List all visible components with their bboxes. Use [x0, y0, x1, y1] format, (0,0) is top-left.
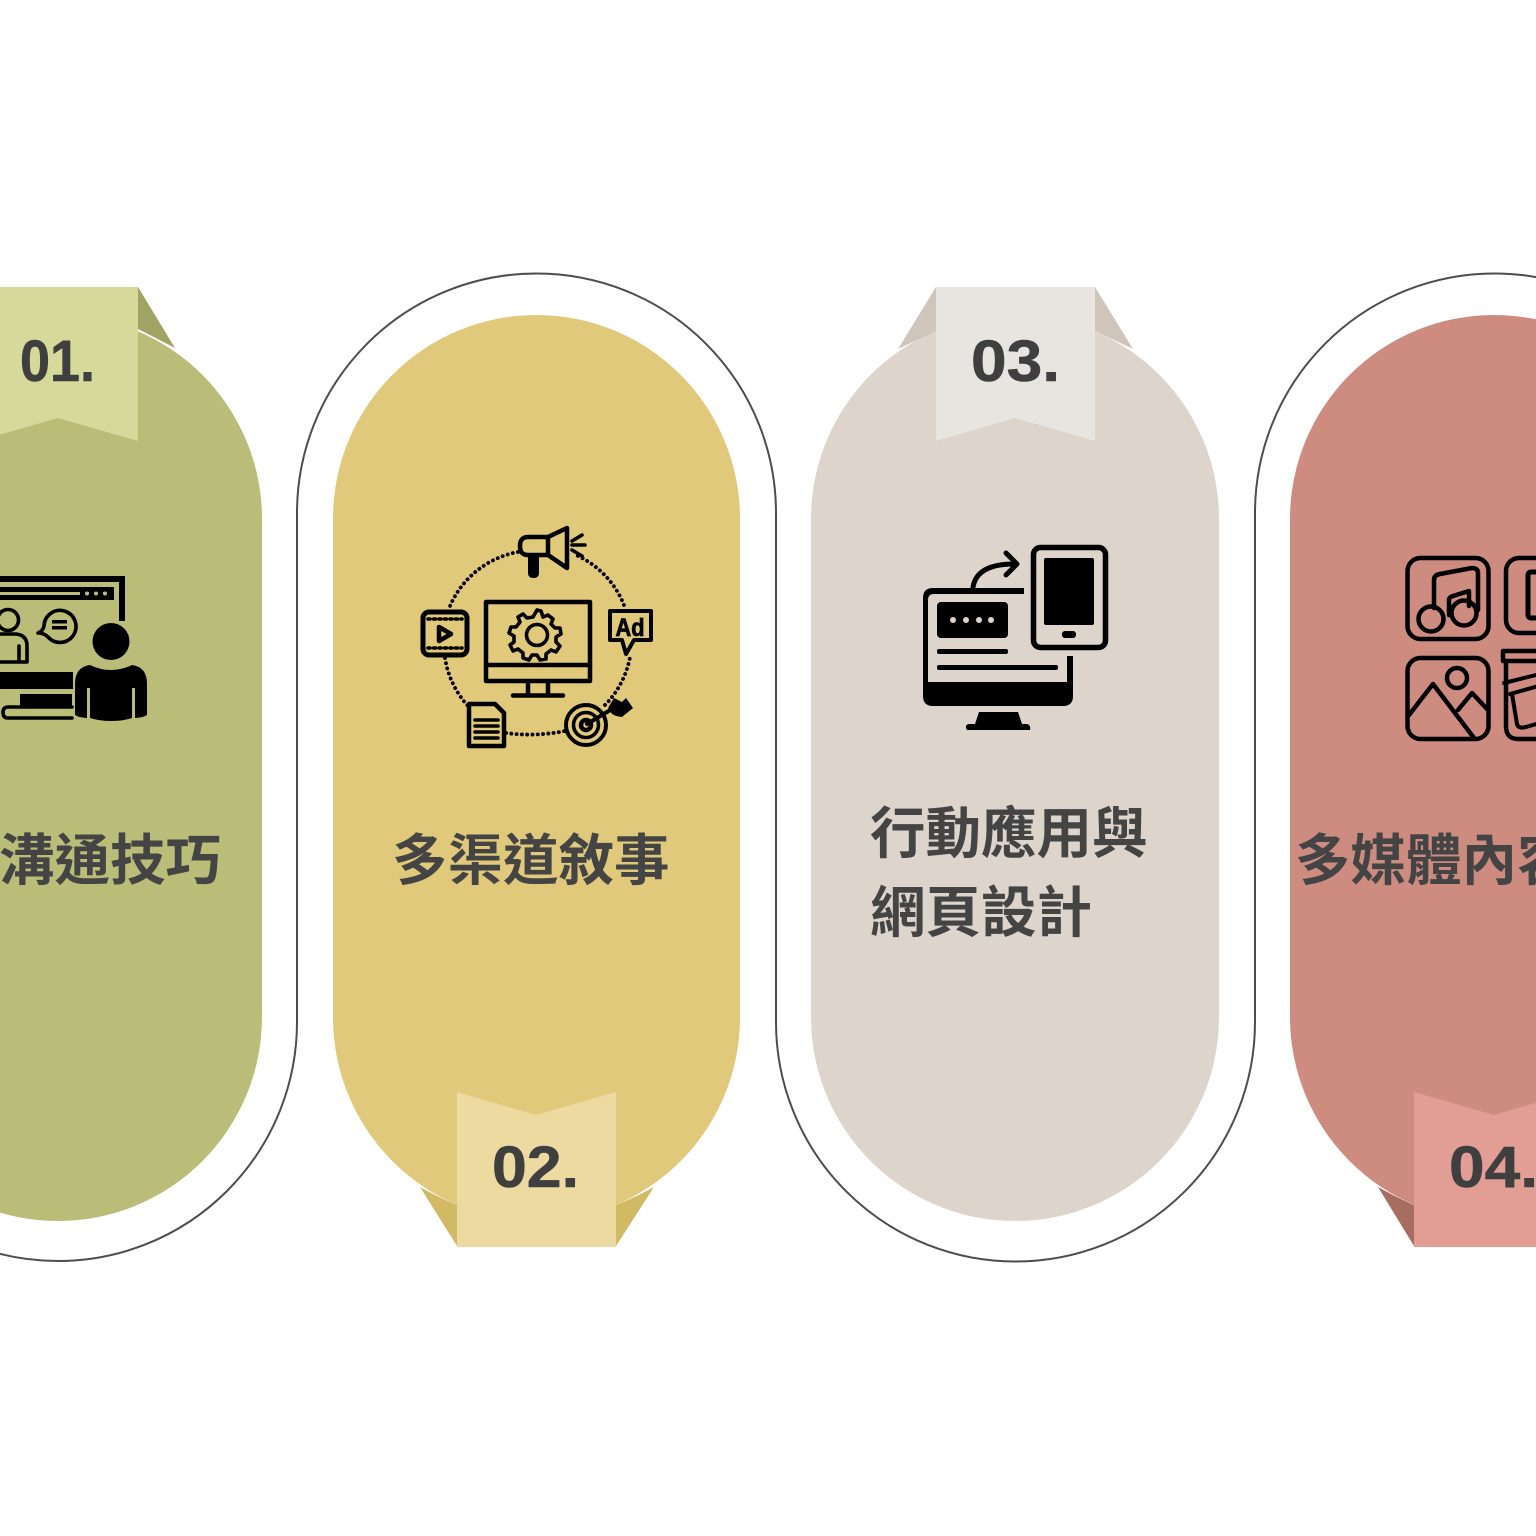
- serpentine outline connecting the pills: [0, 274, 1536, 1262]
- pill body 03: [811, 315, 1219, 1221]
- ribbon 01: [0, 287, 138, 441]
- pill body 02: [333, 315, 740, 1221]
- fold shadows 03: [898, 287, 1133, 349]
- number 02: 02.: [492, 1135, 579, 1200]
- panel: 04 multimedia content: [1290, 315, 1536, 1247]
- icon: digital marketing cycle: Ad: [616, 614, 644, 642]
- label 03: 行動應用與: [870, 803, 1148, 865]
- panel: 03 mobile app and web design: [811, 287, 1219, 1221]
- ribbon 03: [936, 287, 1095, 441]
- fold shadow 04: [1378, 1187, 1414, 1246]
- ribbon 02: [457, 1092, 616, 1247]
- icon: digital marketing cycle: [423, 528, 651, 746]
- panel: 02 multichannel storytelling: [333, 315, 740, 1247]
- panel: 01 communication skills: [0, 287, 262, 1221]
- number 04: 04.: [1449, 1135, 1536, 1200]
- label 02: 多渠道敘事: [392, 830, 670, 892]
- label 01: 溝通技巧: [0, 830, 221, 892]
- icon: presenter with screen: [0, 576, 147, 721]
- icon: media tiles: [1408, 558, 1536, 739]
- pill body 04: [1290, 315, 1536, 1221]
- label 03: 網頁設計: [870, 882, 1092, 944]
- number 01: 01.: [20, 329, 95, 394]
- fold shadows 02: [420, 1187, 654, 1246]
- number 03: 03.: [971, 329, 1060, 394]
- pill body 01: [0, 315, 262, 1221]
- label 03: [870, 803, 1148, 944]
- ribbon 04: [1414, 1092, 1536, 1247]
- icon: devices: [923, 548, 1106, 730]
- fold shadow 01: [138, 287, 175, 348]
